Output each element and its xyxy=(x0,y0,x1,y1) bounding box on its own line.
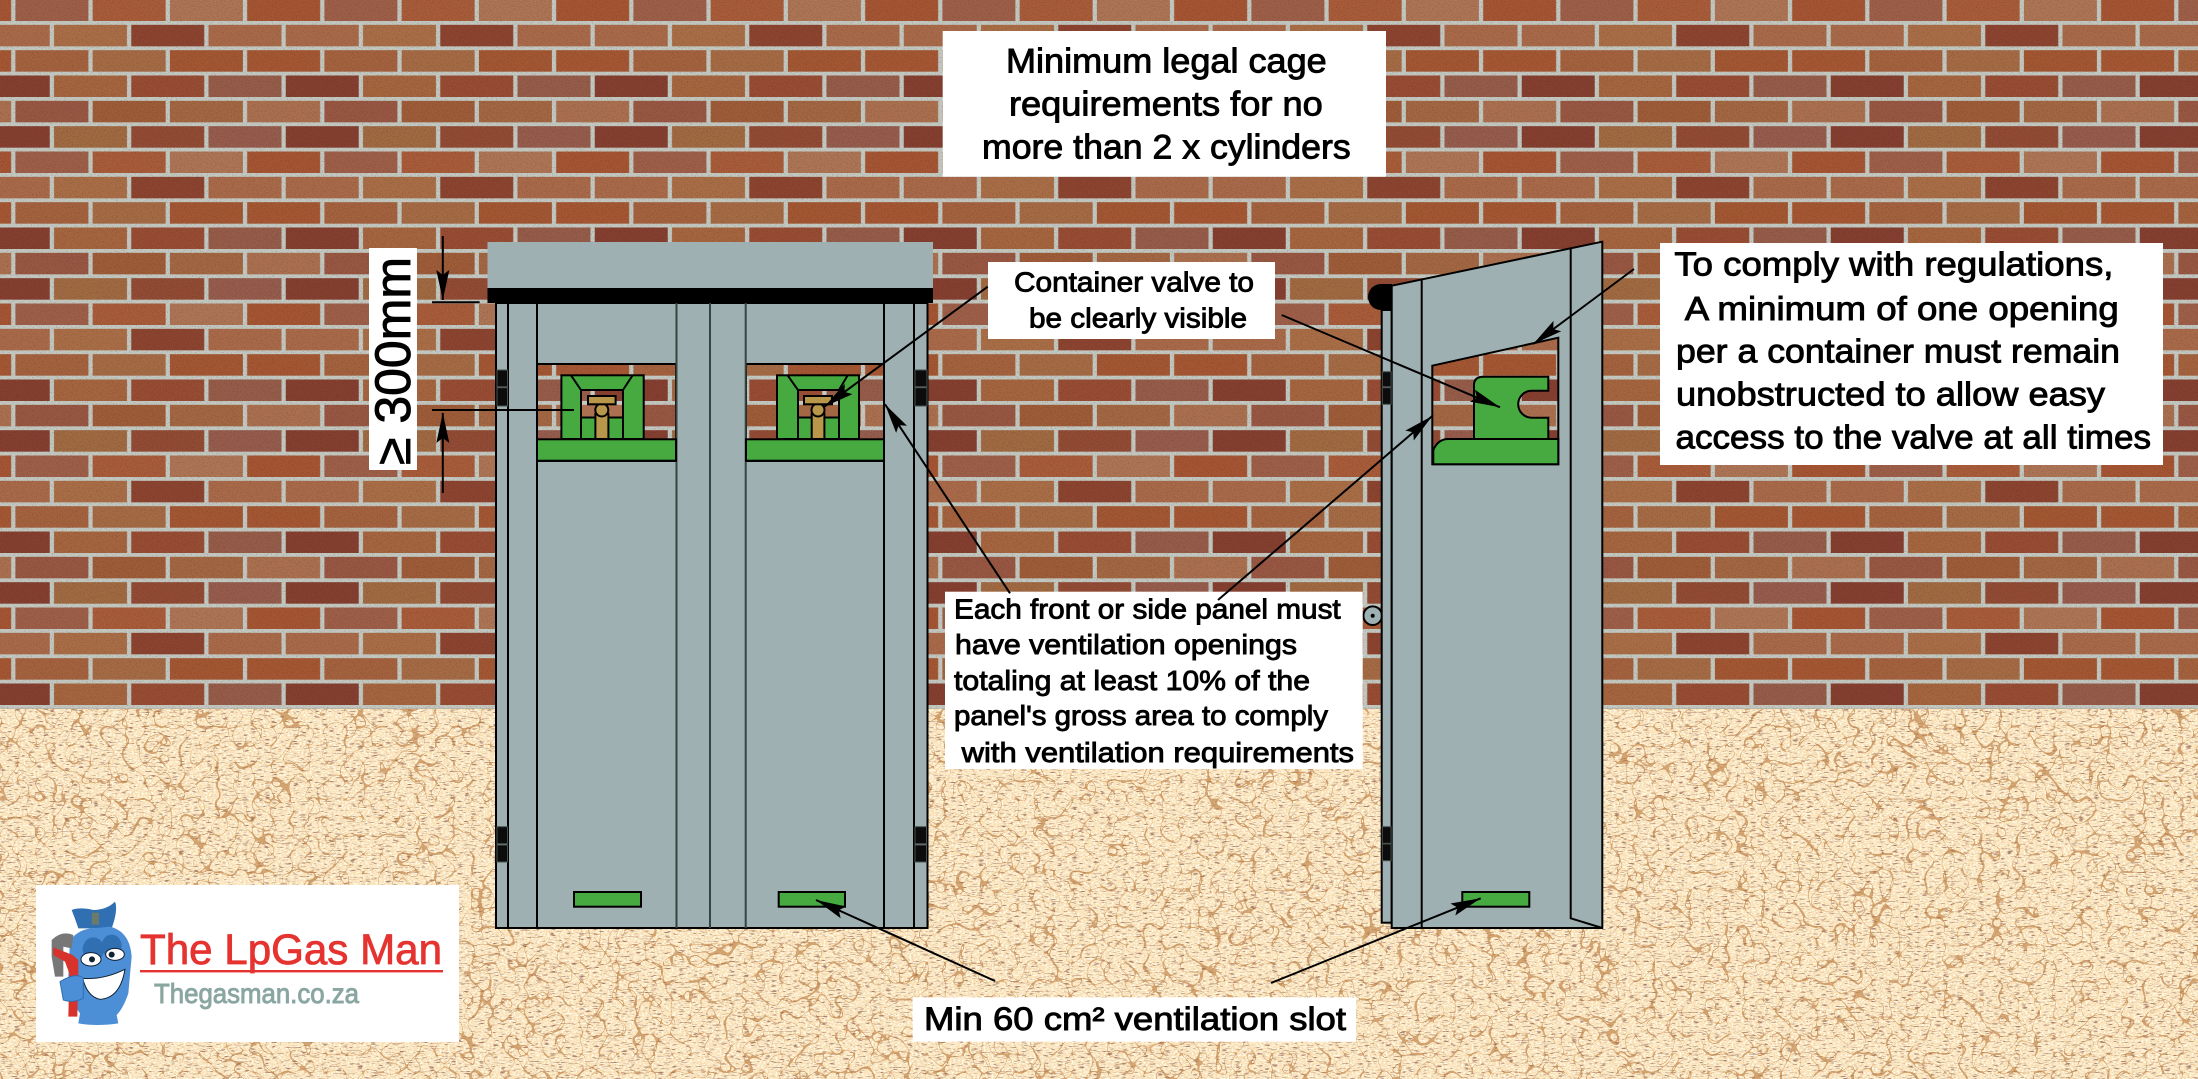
title: Minimum legal cage xyxy=(1006,43,1327,81)
roof xyxy=(488,242,933,303)
hinge top cap xyxy=(1368,284,1392,310)
logo: The LpGas Man: The LpGas Man xyxy=(140,926,442,974)
cage front view xyxy=(488,242,933,928)
hinges xyxy=(497,370,927,862)
callout: ventilation slot: Min 60 cm² ventilation slot xyxy=(924,1001,1346,1037)
icon: cylinder mascot with wrench xyxy=(52,902,132,1025)
callout: ventilation openings: Each front or side panel must xyxy=(954,593,1341,624)
knob xyxy=(1363,606,1382,625)
callout: container valve: be clearly visible xyxy=(1029,302,1247,333)
label: 300mm minimum height: ≥ 300mm xyxy=(365,257,421,465)
callout: regulations: To comply with regulations, xyxy=(1674,247,2113,284)
cage body with window openings xyxy=(496,303,928,928)
callout: ventilation slot xyxy=(913,997,1356,1042)
callout: container valve: Container valve to xyxy=(1014,267,1254,298)
logo: The LpGas Man xyxy=(36,885,459,1042)
title: requirements for no xyxy=(1009,86,1323,124)
callout: ventilation openings xyxy=(945,592,1363,769)
brick wall background xyxy=(0,0,2198,709)
callout: ventilation openings: have ventilation openings xyxy=(955,629,1297,660)
gravel ground xyxy=(0,709,2198,1079)
logo: The LpGas Man: Thegasman.co.za xyxy=(154,978,359,1009)
title xyxy=(943,31,1386,177)
callout: container valve xyxy=(988,262,1275,339)
cage side door xyxy=(1363,242,1602,928)
title: more than 2 x cylinders xyxy=(982,128,1351,166)
door edge strip xyxy=(1382,310,1392,923)
right window cylinder xyxy=(746,375,884,461)
door ventilation slot xyxy=(1462,892,1529,907)
dimension lines: 300mm xyxy=(432,236,574,493)
callout: regulations: access to the valve at all times xyxy=(1676,419,2151,456)
door window contents xyxy=(1433,377,1558,464)
arrows xyxy=(816,269,1634,983)
door panel xyxy=(1392,242,1602,928)
ventilation slots xyxy=(574,892,641,907)
callout: regulations: unobstructed to allow easy xyxy=(1676,377,2105,414)
callout: regulations: A minimum of one opening xyxy=(1685,291,2119,328)
callout: ventilation openings: totaling at least 10% of the xyxy=(954,665,1310,696)
callout: ventilation openings: with ventilation requirements xyxy=(961,737,1354,768)
door hinges xyxy=(1382,372,1391,861)
callout: regulations xyxy=(1660,243,2163,465)
callout: regulations: per a container must remain xyxy=(1676,334,2120,371)
callout: ventilation openings: panel's gross area to comply xyxy=(954,700,1328,731)
left window cylinder xyxy=(537,375,676,461)
